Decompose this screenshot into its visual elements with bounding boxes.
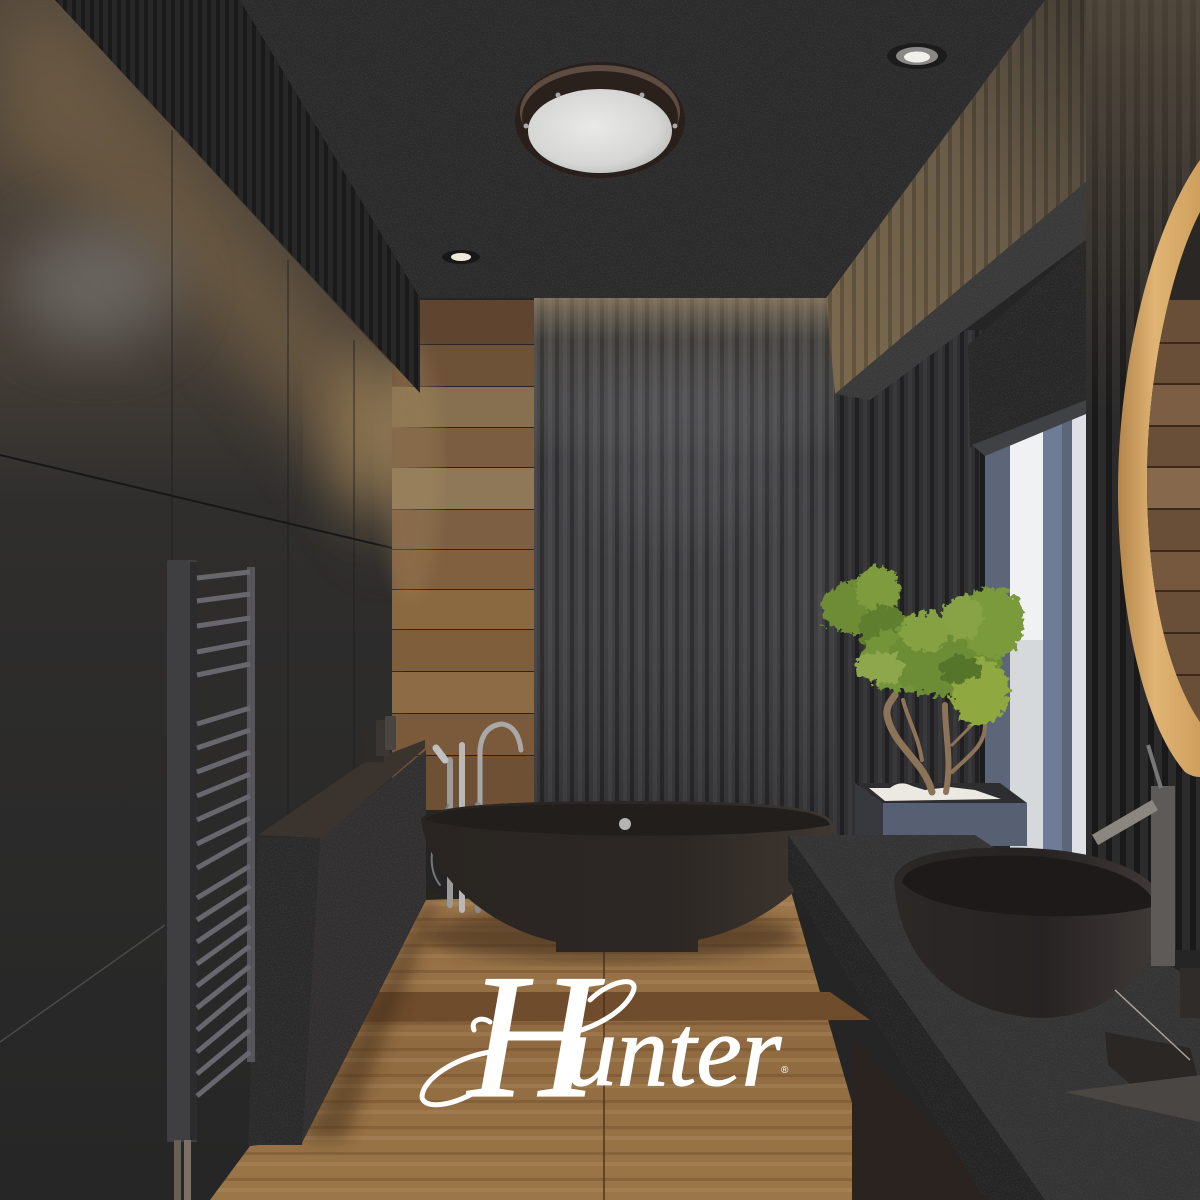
vanity counter [788, 835, 1200, 1200]
recessed light right [887, 43, 947, 69]
bathtub [421, 801, 834, 952]
towel radiator [167, 560, 255, 1200]
right soffit with warm slats [826, 0, 1088, 400]
mirror wood frame [1118, 160, 1200, 777]
floor [210, 888, 880, 1200]
plant [821, 566, 1024, 792]
logo flourishes [422, 982, 634, 1105]
ceiling [230, 0, 1050, 298]
recessed light left [442, 250, 480, 264]
foliage [821, 566, 1024, 725]
counter accessories [1064, 968, 1200, 1122]
round mirror [1118, 160, 1200, 777]
vessel sink [894, 848, 1163, 1018]
wood plank wall [380, 300, 534, 810]
right side slatted wall [834, 330, 987, 840]
upper right dark wall [968, 240, 1086, 448]
slatted soffit left [55, 0, 420, 393]
granite ledge block [248, 740, 426, 1145]
logo wordmark: H [466, 937, 605, 1135]
ceiling flush-mount light [515, 62, 685, 178]
vanity cabinet [852, 1036, 1000, 1200]
left wall [0, 0, 420, 1200]
white stones [869, 783, 1001, 801]
sink faucet [1095, 745, 1175, 966]
right slatted column [1086, 0, 1200, 950]
planter with stones [855, 783, 1027, 846]
soffit underside [835, 182, 1086, 400]
window [972, 400, 1086, 856]
mirror glass reflection [1147, 212, 1200, 722]
centre slatted wall [534, 298, 834, 838]
wall light glow [0, 0, 395, 560]
radiator pipes [174, 1140, 181, 1200]
sink inner bowl [902, 856, 1155, 916]
registered mark: ® [781, 1065, 789, 1076]
logo: Hunter [422, 937, 789, 1135]
counter front edge [788, 835, 1045, 1200]
tub inner [425, 804, 830, 836]
toiletry bottles [363, 716, 396, 762]
trunks [887, 695, 985, 792]
logo wordmark: unter [566, 995, 782, 1108]
ledge top [258, 740, 425, 838]
tub drain [619, 818, 631, 830]
bath faucet [432, 724, 521, 910]
glass lens [528, 89, 672, 173]
